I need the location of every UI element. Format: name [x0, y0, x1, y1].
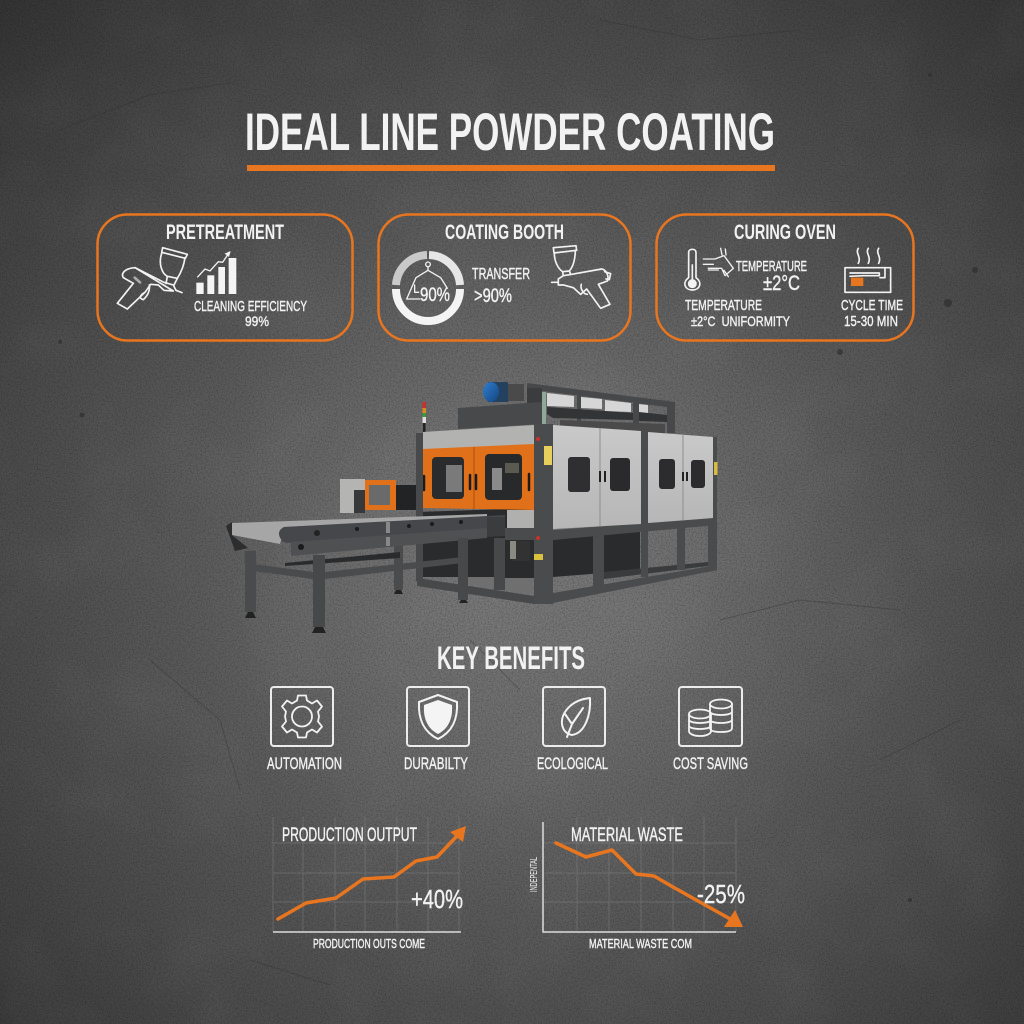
icon: oven with heat [845, 248, 891, 292]
temperature value: ±2°C [763, 272, 800, 295]
chart: production output [273, 817, 466, 951]
gray upper band [423, 425, 534, 450]
temperature uniformity value: ±2°C UNIFORMITY [691, 313, 791, 329]
stack light [422, 402, 426, 432]
y axis label: INDEPENTAL [529, 857, 540, 892]
icon: heat element [703, 248, 733, 277]
machine: powder coating line [226, 382, 718, 633]
cycle time label: CYCLE TIME [841, 297, 903, 314]
axis [273, 931, 461, 933]
title underline [247, 165, 775, 171]
white oven panel two [648, 432, 718, 523]
control cabinet on top [458, 402, 542, 429]
orange doors section [423, 444, 534, 510]
icon: ring gauge with 90% [396, 255, 460, 321]
icon: ring gauge with 90%: 90% [420, 285, 450, 306]
benefit: cost saving [673, 687, 748, 773]
title: IDEAL LINE POWDER COATING [245, 103, 775, 162]
heading: coating booth: COATING BOOTH [445, 221, 564, 244]
label: durabilty: DURABILTY [404, 754, 468, 773]
icon: thermometer [685, 249, 700, 290]
icon: spray gun [117, 248, 187, 309]
gray panel below orange [507, 510, 534, 529]
transfer value: >90% [474, 286, 512, 307]
blue motor [483, 382, 524, 402]
cleaning efficiency label: CLEANING EFFICIENCY [194, 298, 307, 315]
lower dark interior [417, 508, 534, 584]
icon: rising bars [196, 251, 236, 294]
rear legs and crossbars [245, 545, 403, 612]
heading: pretreatment: PRETREATMENT [166, 221, 284, 244]
grid [273, 817, 459, 932]
icon: coin stacks [689, 700, 732, 736]
rear lower rails [604, 562, 708, 579]
trend line arrow [556, 843, 743, 927]
axes [543, 822, 736, 932]
trend line arrow [278, 826, 466, 919]
axis label: PRODUCTION OUTS COME [313, 936, 425, 951]
heading: curing oven: CURING OVEN [734, 221, 836, 244]
label: ecological: ECOLOGICAL [537, 754, 608, 773]
chart title: PRODUCTION OUTPUT [282, 825, 417, 846]
axis label: MATERIAL WASTE COM [589, 936, 692, 951]
belt [228, 514, 487, 544]
icon: leaf [562, 698, 590, 737]
label: cost saving: COST SAVING [673, 754, 748, 773]
panel: pretreatment [98, 214, 352, 340]
label: automation: AUTOMATION [267, 754, 342, 773]
icon: gear [282, 696, 322, 738]
panel: curing oven [656, 214, 914, 340]
cycle time value: 15-30 MIN [844, 313, 898, 330]
benefit: durability [404, 687, 469, 773]
chart: material waste [529, 817, 745, 951]
white oven panel one [553, 425, 641, 529]
front legs [313, 555, 325, 627]
side rails [279, 515, 505, 543]
chart value: -25% [697, 879, 745, 909]
benefit: ecological [537, 687, 608, 773]
chart title: MATERIAL WASTE [571, 825, 683, 846]
grid [543, 817, 736, 932]
benefit: automation [267, 687, 342, 773]
cleaning efficiency value: 99% [245, 313, 269, 329]
transfer label: TRANSFER [472, 266, 530, 283]
temperature uniformity label: TEMPERATURE [685, 297, 762, 314]
conveyor [226, 514, 505, 633]
icon: spray gun [552, 246, 611, 308]
panel: coating booth [378, 214, 630, 340]
icon: shield [419, 695, 457, 739]
side unit with orange door [340, 479, 416, 513]
chart value: +40% [411, 884, 463, 914]
top frame and rollers [527, 383, 675, 434]
heading: key benefits: KEY BENEFITS [437, 640, 585, 676]
temperature label: TEMPERATURE [736, 258, 807, 275]
dark frame columns [416, 424, 717, 604]
